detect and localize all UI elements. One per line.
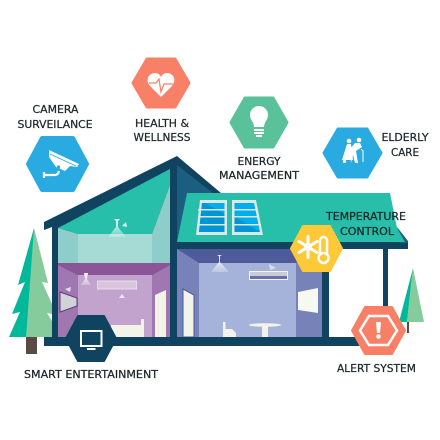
tree: right pine: [399, 268, 424, 333]
roof: inner right slope: [177, 165, 213, 242]
label: temperature control: [325, 210, 406, 238]
label: camera surveilance: CAMERA: [32, 103, 79, 116]
icon: alert hexagon: [352, 307, 405, 354]
roof: gable dark shell: [44, 156, 221, 338]
icon: energy hexagon: [231, 98, 287, 147]
label: temperature control: CONTROL: [340, 225, 395, 238]
label: health and wellness: [134, 117, 191, 144]
label: temperature control: TEMPERATURE: [325, 210, 406, 223]
label: elderly care: ELDERLY: [382, 131, 429, 144]
solar panel left: [196, 200, 227, 235]
flat roof: dark edge: [177, 242, 408, 249]
label: camera surveilance: [18, 103, 93, 131]
floor slab: [44, 337, 362, 346]
label: elderly care: CARE: [391, 146, 419, 159]
solar panel right: [232, 200, 263, 235]
attic room: [58, 169, 170, 263]
label: elderly care: [382, 131, 429, 159]
posts: [170, 160, 388, 338]
label: camera surveilance: SURVEILANCE: [18, 118, 93, 131]
label: energy management: MANAGEMENT: [219, 169, 299, 182]
flat roof: teal slab: [177, 193, 405, 242]
icon: health hexagon: [133, 59, 189, 107]
tree: left pine: [9, 228, 62, 354]
label: energy management: [219, 155, 299, 182]
icon: temperature hexagon: [291, 226, 342, 271]
label: alert system: ALERT SYSTEM: [337, 362, 416, 375]
icon: camera hexagon: [28, 138, 87, 190]
house: [44, 156, 408, 346]
bedroom: [58, 263, 170, 337]
label: health and wellness: WELLNESS: [134, 131, 191, 144]
living room: [177, 249, 322, 337]
flat roof: right corner shade: [397, 227, 408, 243]
icon: elderly hexagon: [324, 129, 381, 177]
label: smart entertainment: SMART ENTERTAINMENT: [24, 368, 158, 381]
label: health and wellness: HEALTH &: [135, 117, 189, 130]
icon: entertainment hexagon: [66, 316, 116, 361]
label: energy management: ENERGY: [238, 155, 281, 168]
